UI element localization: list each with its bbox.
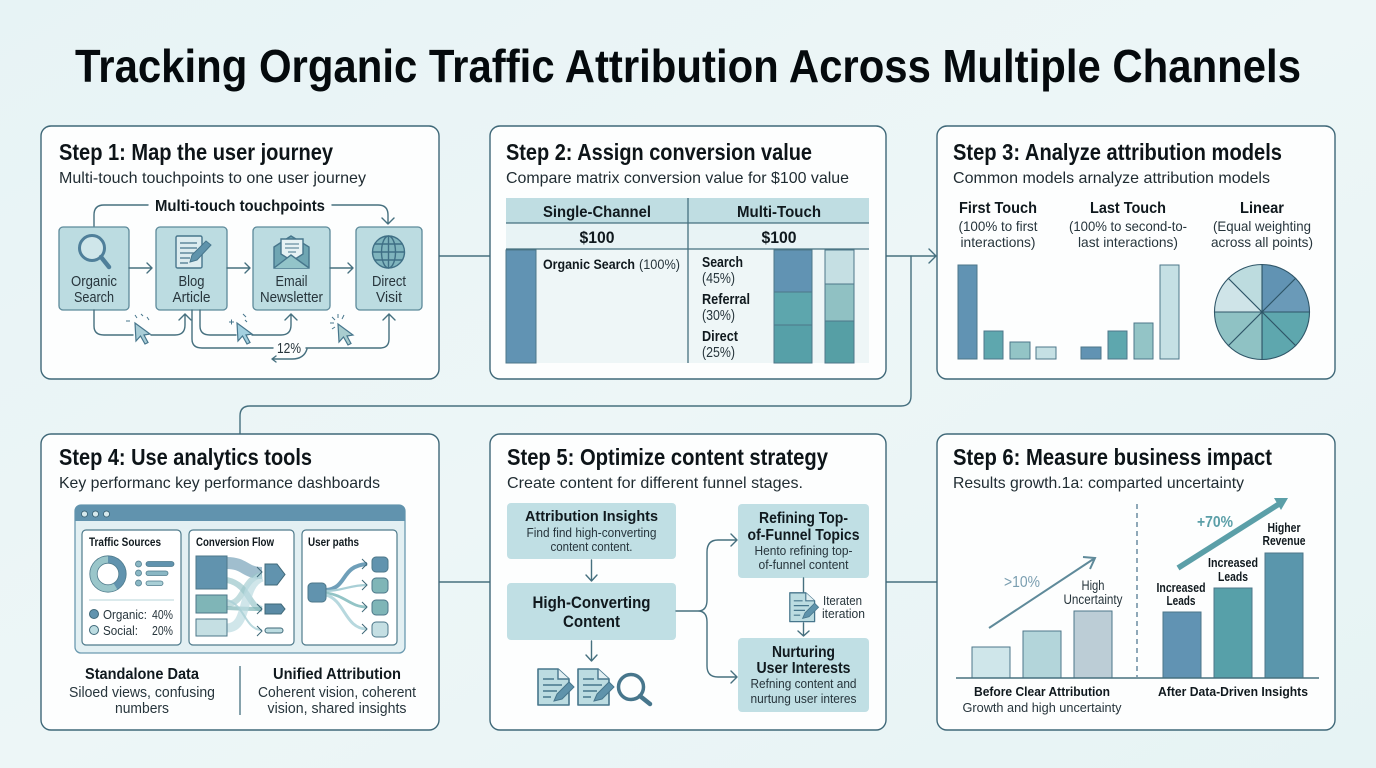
stacked bar: multi-touch 1: [774, 250, 812, 363]
arrow: before trend: [989, 557, 1095, 628]
label: increased leads 1: Increased: [1156, 580, 1206, 595]
card: traffic sources: Traffic Sources: [89, 537, 161, 549]
label: 12 percent: 12%: [277, 340, 301, 357]
model: last touch label: (100% to second-to-: [1069, 218, 1187, 234]
label: high uncertainty: [1064, 578, 1123, 607]
text: standalone data: Standalone Data: [85, 666, 199, 683]
label: organic search: Organic: [71, 273, 117, 290]
panel: step 5: [490, 434, 886, 730]
label: direct share: [702, 329, 738, 361]
bar chart: after: [1163, 553, 1303, 678]
stat: organic: Organic:: [103, 607, 147, 622]
label: direct share: (25%): [702, 345, 735, 361]
model: first touch label: [958, 200, 1038, 250]
label: referral share: (30%): [702, 308, 735, 324]
label: increased leads 2: Increased: [1208, 555, 1258, 570]
label: organic search share: Organic Search: [543, 257, 635, 272]
stat: social: 20%: [152, 623, 173, 638]
donut chart: [90, 556, 126, 592]
arrow: email to direct: [330, 263, 353, 273]
heading: step 3: Step 3: Analyze attribution models: [953, 139, 1282, 165]
label: direct visit: Visit: [376, 289, 403, 306]
label: organic search: [71, 273, 117, 306]
box: nurturing user interests: Refning content and: [750, 677, 857, 691]
comparison table: [506, 198, 869, 363]
arrow: step 2 to step 3: [886, 249, 936, 263]
model: linear label: (Equal weighting: [1213, 218, 1311, 234]
arrow: step 3 row wrap to step 4: [240, 256, 911, 434]
model: last touch label: Last Touch: [1090, 200, 1166, 217]
column header: single-channel: Single-Channel: [543, 204, 651, 221]
heading: step 1: Step 1: Map the user journey: [59, 139, 333, 165]
icon: cursor 3: [330, 314, 353, 345]
label: increased leads 2: [1208, 555, 1258, 584]
node: organic search: [59, 227, 129, 310]
label: multi-touch touchpoints: Multi-touch touchpoints: [155, 198, 325, 215]
subheading: step 4: Key performanc key performance dashboards: [59, 475, 380, 492]
arrow: organic to blog: [129, 263, 152, 273]
text: unified attribution: vision, shared insights: [268, 701, 406, 717]
path nodes: [308, 557, 388, 637]
icon: document 2: [578, 669, 614, 705]
subheading: step 5: Create content for different funnel stages.: [507, 475, 803, 492]
arrow: content branches: [676, 534, 737, 683]
pie chart: linear: [1214, 264, 1310, 360]
box: attribution insights: Attribution Insights: [525, 508, 658, 525]
box: refining top-of-funnel: of-funnel content: [758, 558, 849, 572]
label: increased leads 1: Leads: [1166, 593, 1196, 608]
label: referral share: [702, 292, 750, 324]
heading: step 2: Step 2: Assign conversion value: [506, 139, 812, 165]
panel: step 4: [41, 434, 439, 730]
box: refining top-of-funnel: [738, 504, 869, 578]
model: linear label: across all points): [1211, 234, 1313, 250]
bar chart: last touch: [1081, 265, 1179, 359]
arrow: top bypass: [94, 205, 394, 227]
label: high uncertainty: High: [1082, 578, 1104, 593]
panel: step 2: [490, 126, 886, 379]
box: high-converting content: [507, 583, 676, 640]
text: standalone data: numbers: [115, 701, 169, 717]
subheading: step 3: Common models arnalyze attribution models: [953, 170, 1270, 187]
sankey flows: [227, 563, 262, 630]
box: attribution insights: Find find high-converting: [526, 525, 656, 540]
label: search share: (45%): [702, 271, 735, 287]
arrow: organic loop to blog: [94, 310, 191, 335]
label: email newsletter: Newsletter: [260, 289, 323, 306]
label: high uncertainty: Uncertainty: [1064, 592, 1123, 607]
box: nurturing user interests: Nurturing: [772, 644, 835, 661]
caption: before clear attribution: [962, 684, 1122, 715]
panel: step 3: [937, 126, 1335, 379]
text: unified attribution: [258, 666, 416, 717]
model: first touch label: interactions): [960, 234, 1036, 250]
label: email newsletter: Email: [276, 273, 308, 290]
node: email newsletter: [253, 227, 330, 310]
card: user paths: User paths: [308, 537, 359, 549]
arrow: refining to nurturing: [798, 578, 809, 636]
path curves: [326, 559, 367, 634]
box: nurturing user interests: nurtung user interes: [750, 692, 856, 706]
icon: magnifier: [80, 236, 109, 267]
box: refining top-of-funnel: Refining Top-: [759, 510, 848, 527]
label: higher revenue: Higher: [1268, 520, 1300, 535]
flow targets: [265, 564, 285, 633]
icon: globe: [372, 236, 404, 268]
icon: cursor 1: [126, 314, 150, 344]
flow sources: [196, 556, 227, 636]
icon: document and pencil: [176, 236, 211, 268]
label: referral share: Referral: [702, 292, 750, 308]
icon: document 1: [538, 669, 574, 705]
label: increased leads 1: [1156, 580, 1206, 608]
arrow: step 5 to step 6: [886, 581, 937, 583]
label: iteration: iteration: [822, 606, 865, 621]
caption: before clear attribution: Before Clear Attribution: [974, 684, 1110, 699]
arrow: blog to email: [227, 263, 250, 273]
box: nurturing user interests: [738, 638, 869, 712]
box: refining top-of-funnel: of-Funnel Topics: [748, 527, 860, 544]
label: direct visit: Direct: [372, 273, 407, 290]
label: search share: Search: [702, 255, 743, 271]
stat: organic: [90, 607, 173, 622]
dashboard window: [75, 505, 405, 653]
label: increased leads 2: Leads: [1218, 569, 1248, 584]
value: single-channel: $100: [580, 228, 614, 247]
subheading: step 2: Compare matrix conversion value for $100 value: [506, 170, 849, 187]
box: high-converting content: Content: [563, 612, 620, 631]
box: attribution insights: content content.: [550, 539, 632, 554]
label: iteration: [822, 593, 865, 621]
arrow: 12 percent return: [272, 349, 307, 362]
node: direct visit: [356, 227, 422, 310]
card: traffic sources: [82, 530, 181, 645]
text: standalone data: [69, 666, 215, 717]
text: unified attribution: Unified Attribution: [273, 666, 401, 683]
stat: social: Social:: [103, 623, 138, 638]
arrow: content to icons: [586, 641, 597, 661]
box: refining top-of-funnel: Hento refining top-: [754, 544, 852, 558]
stat: organic: 40%: [152, 607, 173, 622]
model: last touch label: [1069, 200, 1187, 250]
box: nurturing user interests: User Interests: [756, 660, 850, 677]
label: organic search share: (100%): [639, 257, 680, 272]
bar: single channel: [506, 250, 536, 363]
stacked bar: multi-touch 2: [825, 250, 854, 363]
heading: step 4: Step 4: Use analytics tools: [59, 444, 312, 470]
model: first touch label: First Touch: [959, 200, 1037, 217]
label: iteration: Iteraten: [823, 593, 862, 608]
arrow: insights to content: [586, 560, 597, 581]
card: conversion flow: [189, 530, 294, 645]
box: high-converting content: High-Converting: [532, 593, 650, 612]
model: linear label: Linear: [1240, 200, 1284, 217]
icon: magnifier: [618, 674, 650, 704]
column header: multi-touch: Multi-Touch: [737, 204, 821, 221]
heading: step 5: Step 5: Optimize content strategy: [507, 444, 828, 470]
model: linear label: [1211, 200, 1313, 250]
donut legend: [136, 561, 174, 586]
label: blog article: [172, 273, 210, 306]
arrow: after trend: [1178, 498, 1288, 568]
label: search share: [702, 255, 743, 287]
bar chart: first touch: [958, 265, 1056, 359]
panel: step 1: [41, 126, 439, 379]
label: organic search: Search: [74, 289, 114, 306]
label: blog article: Blog: [178, 273, 204, 290]
model: last touch label: last interactions): [1078, 234, 1178, 250]
icon: cursor 2: [229, 314, 252, 344]
icon: iteration document: [790, 593, 819, 622]
label: higher revenue: [1262, 520, 1306, 548]
box: attribution insights: [507, 503, 676, 559]
card: user paths: [302, 530, 397, 645]
model: first touch label: (100% to first: [958, 218, 1038, 234]
arrow: step 1 to step 2: [439, 255, 490, 257]
icon: envelope: [274, 236, 309, 268]
label: higher revenue: Revenue: [1262, 533, 1306, 548]
heading: step 6: Step 6: Measure business impact: [953, 444, 1272, 470]
stat: social: [90, 623, 173, 638]
label: greater than 10 percent: >10%: [1004, 574, 1040, 591]
text: unified attribution: Coherent vision, coherent: [258, 685, 416, 701]
label: email newsletter: [260, 273, 323, 306]
value: multi-touch: $100: [762, 228, 796, 247]
label: plus 70 percent: +70%: [1197, 514, 1233, 531]
caption: before clear attribution: Growth and high uncertainty: [962, 700, 1122, 715]
label: direct visit: [372, 273, 407, 306]
label: direct share: Direct: [702, 329, 738, 345]
arrow: step 4 to step 5: [439, 581, 490, 583]
arrow: blog loop to direct: [192, 310, 395, 348]
subheading: step 6: Results growth.1a: comparted uncertainty: [953, 475, 1244, 492]
subheading: step 1: Multi-touch touchpoints to one user journey: [59, 170, 366, 187]
card: conversion flow: Conversion Flow: [196, 537, 274, 549]
arrow: blog loop to email: [200, 310, 297, 335]
text: standalone data: Siloed views, confusing: [69, 685, 215, 701]
node: blog article: [156, 227, 227, 310]
label: blog article: Article: [172, 289, 210, 306]
caption: after data-driven insights: After Data-Driven Insights: [1158, 684, 1308, 699]
bar chart: before: [972, 611, 1112, 678]
panel: step 6: [937, 434, 1335, 730]
flow arrowheads: [257, 567, 262, 636]
